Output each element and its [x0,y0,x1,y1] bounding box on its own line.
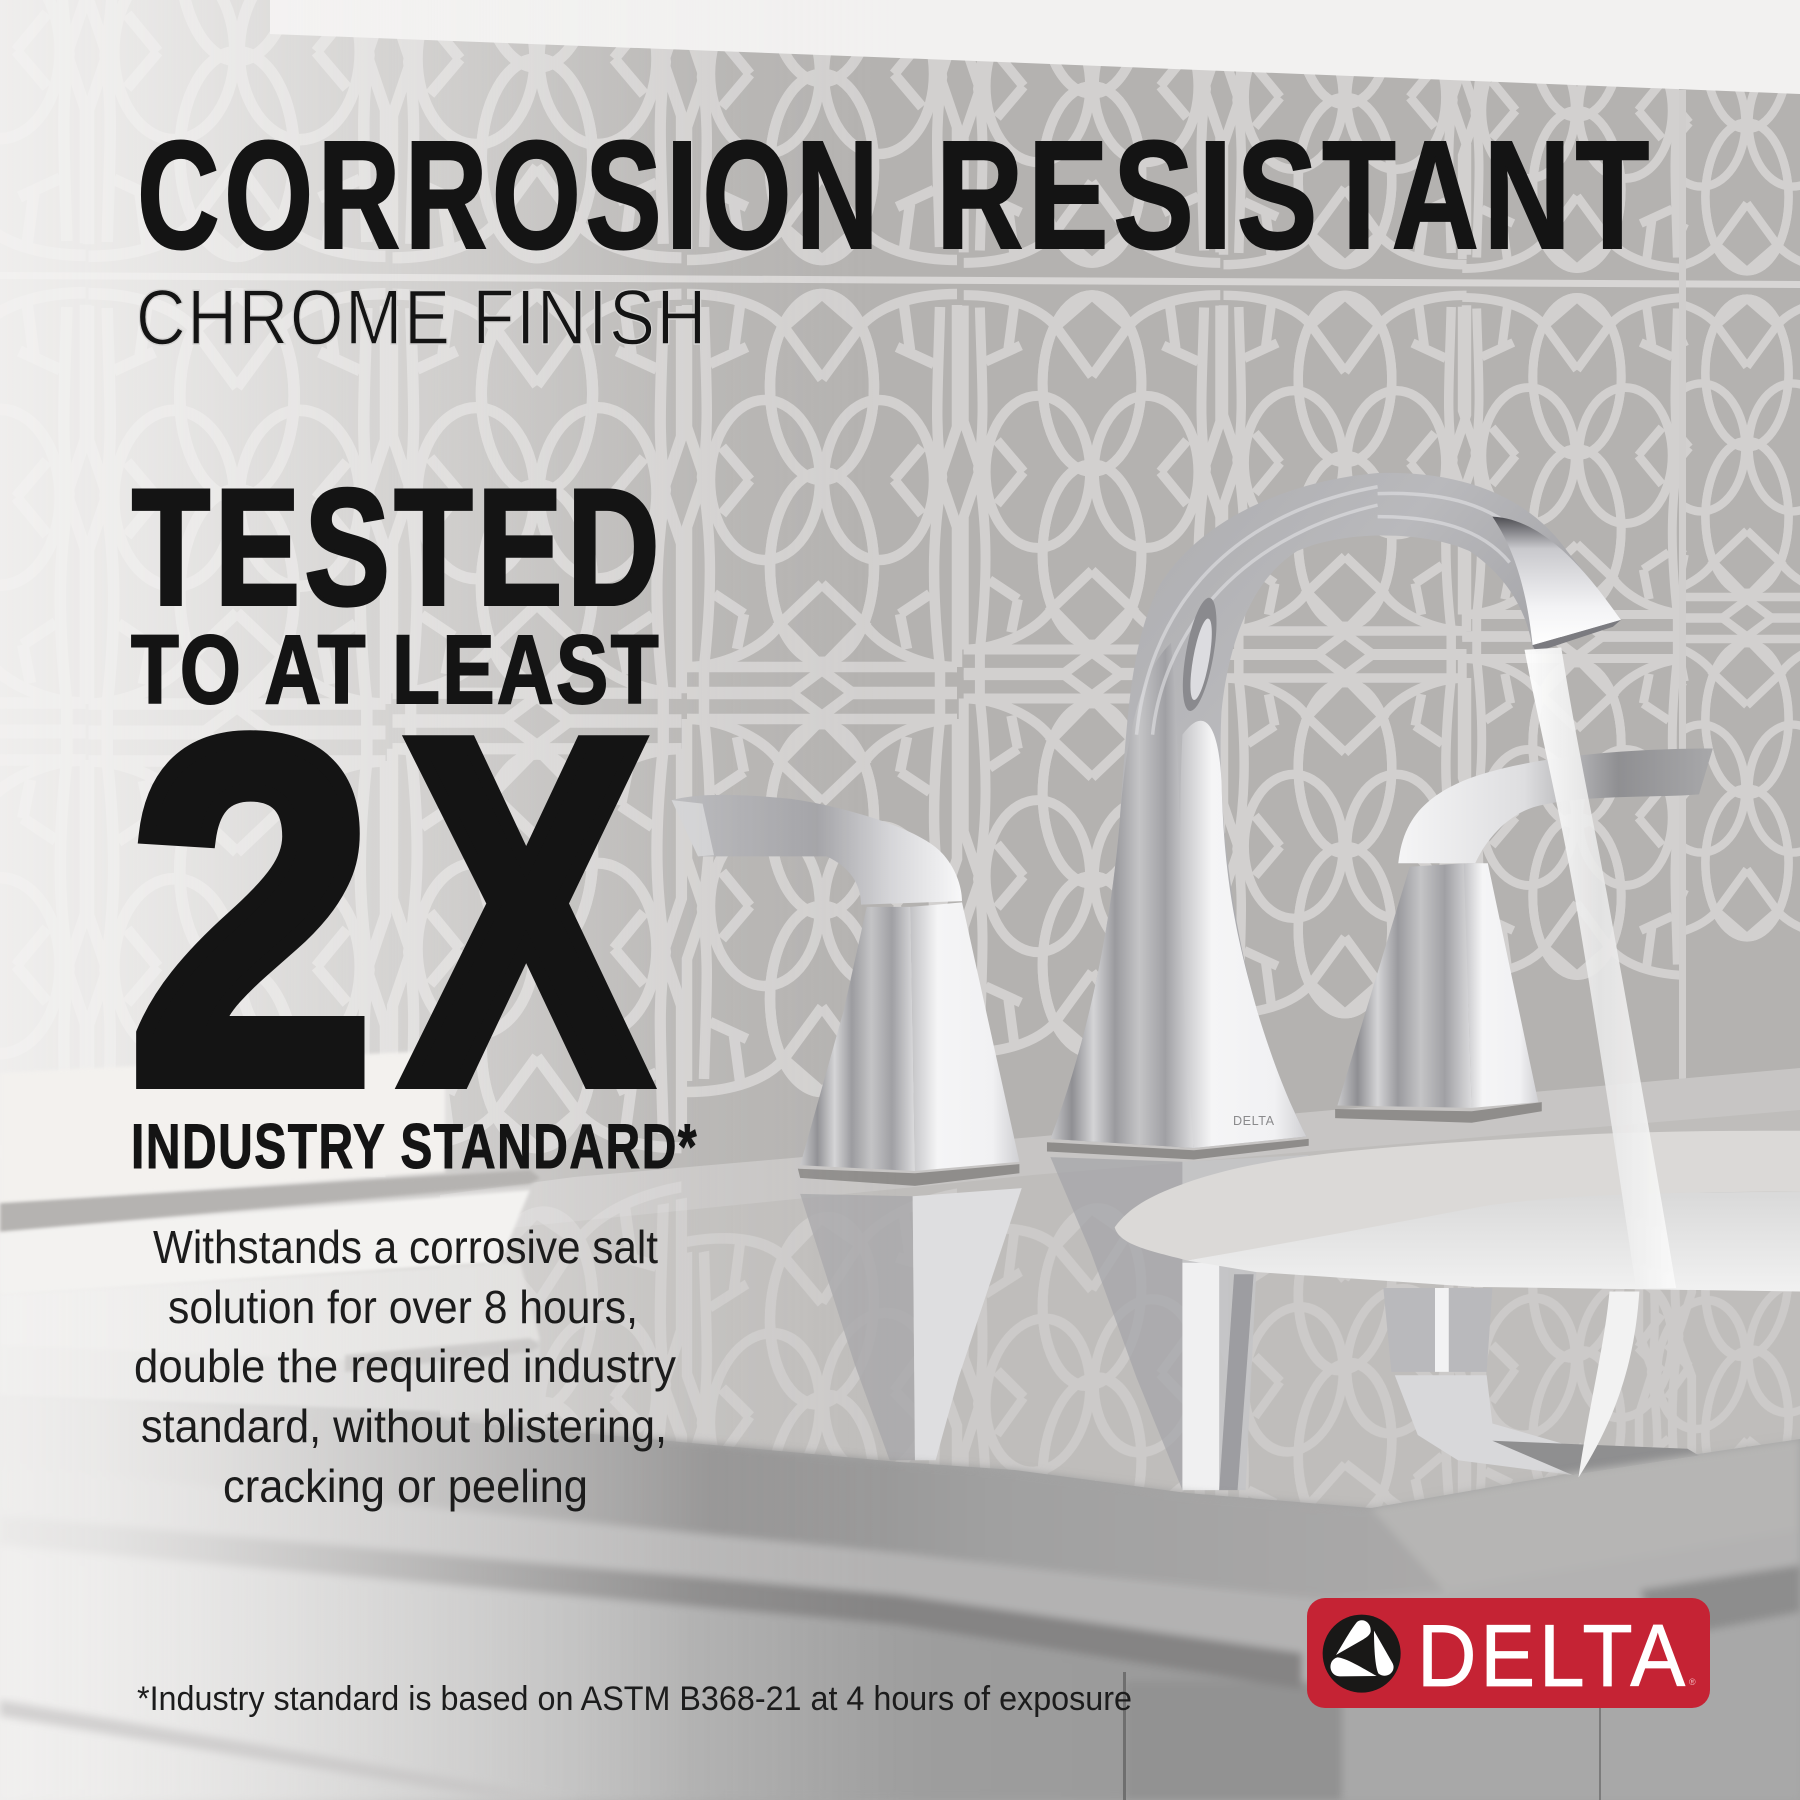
base plate [1047,1139,1309,1159]
center door panel [1126,1682,1342,1800]
aerator [1533,620,1621,652]
tray lower body [0,1190,530,1295]
panel: counter front edge and cabinet [0,1395,1800,1800]
counter edge [0,1395,1800,1600]
right handle lever [1398,748,1713,863]
sink basin [1187,1192,1800,1292]
panel: counter items under fade [0,1262,540,1415]
text block: description: Withstands a corrosive salt [153,1221,658,1273]
footnote: *Industry standard is based on ASTM B368-21 at 4 hours of exposure [137,1680,1132,1718]
heading: tested: TESTED [132,455,664,639]
white fade overlay [0,0,900,1800]
logo: Delta [1307,1598,1710,1708]
title: CORROSION [137,109,883,281]
right handle [1335,748,1713,1123]
arch highlights [1137,487,1527,735]
icon: delta triangle mark [1323,1615,1401,1693]
text block: description: double the required industry [134,1340,676,1392]
reflection: right handle [1383,1288,1699,1475]
heading: to at least: TO AT LEAST [131,615,661,724]
left handle lever [672,795,962,905]
left base plate [798,1164,1019,1186]
text block: description: solution for over 8 hours, [168,1281,638,1333]
cabinet shadow band [0,1515,1302,1689]
text block: description [134,1221,676,1512]
text block: description: cracking or peeling [223,1460,588,1512]
reflection: center spout [1050,1155,1309,1490]
left handle [672,795,1019,1186]
spout inner highlight [1176,595,1223,713]
big number: 2X: 2 [129,639,374,1184]
panel: tile wall [0,0,1800,1300]
lower base tone [0,1290,1800,1800]
tray second rim [345,1338,540,1372]
text block: description: standard, without blistering, [141,1400,667,1452]
spout right facet [1180,721,1306,1148]
spout tip facet [1492,517,1621,645]
spout lower left facet [1050,643,1194,1148]
tray box [0,1050,445,1203]
title [137,109,1654,281]
panel: tray on left [0,1050,540,1372]
cabinet trim [0,1466,1800,1800]
center spout [1047,473,1621,1159]
registered mark: ® [1689,1677,1696,1687]
panel: faucet reflections [800,1155,1699,1490]
callout: 2X claim [129,455,698,1184]
subtitle: CHROME FINISH [136,273,708,361]
cabinet door [0,1548,1342,1800]
reflection: left handle [800,1188,1022,1460]
big number: 2X: X [404,639,650,1184]
logo badge [1307,1598,1710,1708]
spout body [1050,473,1621,1148]
water reflection [1578,1292,1639,1477]
water stream [1525,647,1676,1288]
sink rim [1115,1131,1800,1261]
heading: industry standard: INDUSTRY STANDARD* [131,1112,698,1182]
panel: ceiling trim [270,0,1800,94]
right door panel [1342,1610,1800,1800]
brand mark: DELTA [1233,1114,1275,1128]
door seams [1123,1672,1601,1800]
tray rim [0,1170,540,1232]
lower left accents [0,1700,574,1799]
logo wordmark: DELTA [1417,1606,1689,1705]
right handle body [1337,863,1472,1108]
panel: sink basin and rim [1115,1131,1800,1292]
big number: 2X [129,639,650,1184]
left handle body [800,907,915,1171]
right base plate [1335,1102,1542,1123]
panel: chrome faucet [672,473,1713,1477]
panel: reflective counter top [440,1068,1800,1508]
